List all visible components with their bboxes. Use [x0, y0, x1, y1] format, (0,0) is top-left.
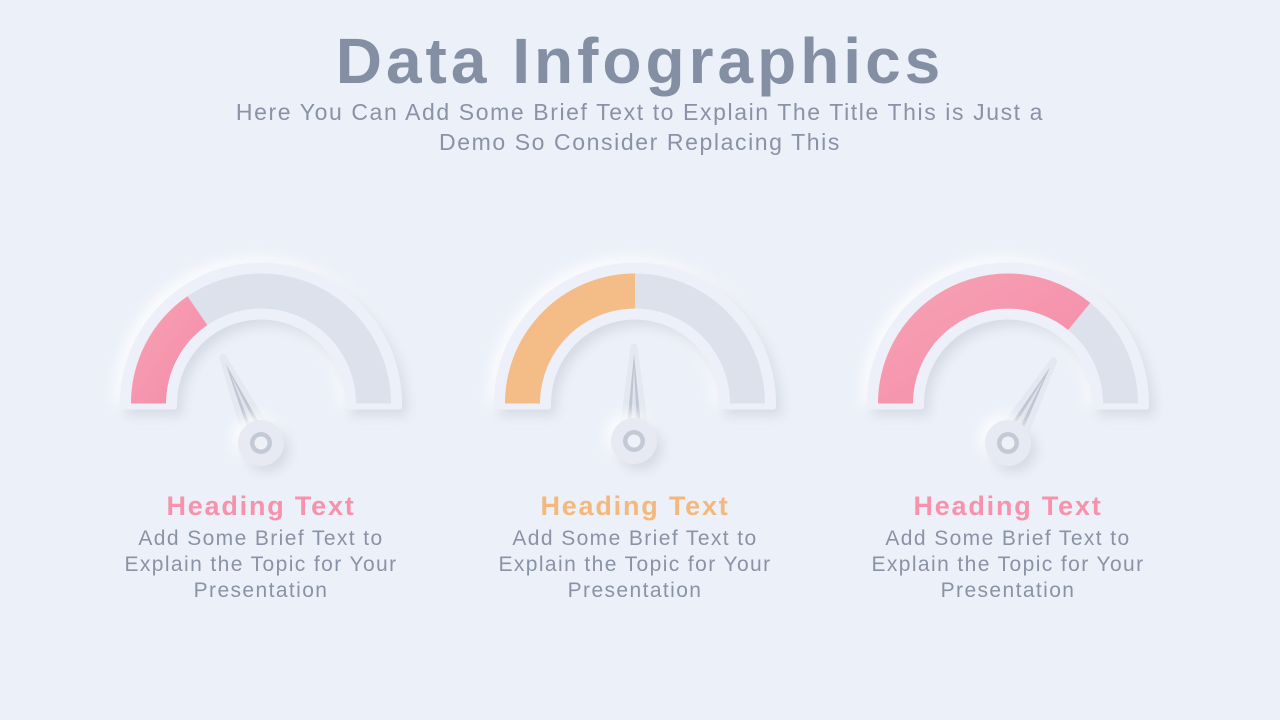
text block 2: Add Some Brief Text to [512, 527, 758, 550]
text block 1: Explain the Topic for Your [124, 553, 398, 576]
text block 2: Heading Text [540, 491, 730, 521]
text block 3: Explain the Topic for Your [871, 553, 1144, 576]
text block 1 [124, 491, 398, 602]
subtitle: Demo So Consider Replacing This [439, 129, 841, 155]
gauge 1 [120, 263, 402, 466]
subtitle [236, 99, 1044, 155]
text block 3 [871, 491, 1144, 602]
title: Data Infographics [336, 25, 944, 97]
subtitle: Here You Can Add Some Brief Text to Explain The Title This is Just a [236, 99, 1044, 125]
text block 1: Presentation [194, 579, 328, 602]
text block 2: Presentation [568, 579, 702, 602]
gauge 2 [494, 263, 776, 464]
text block 1: Add Some Brief Text to [138, 527, 384, 550]
gauge 3 [867, 263, 1149, 466]
text block 3: Presentation [941, 579, 1075, 602]
text block 2 [498, 491, 772, 602]
text block 2: Explain the Topic for Your [498, 553, 772, 576]
text block 3: Add Some Brief Text to [885, 527, 1131, 550]
text block 1: Heading Text [166, 491, 356, 521]
text block 3: Heading Text [913, 491, 1103, 521]
